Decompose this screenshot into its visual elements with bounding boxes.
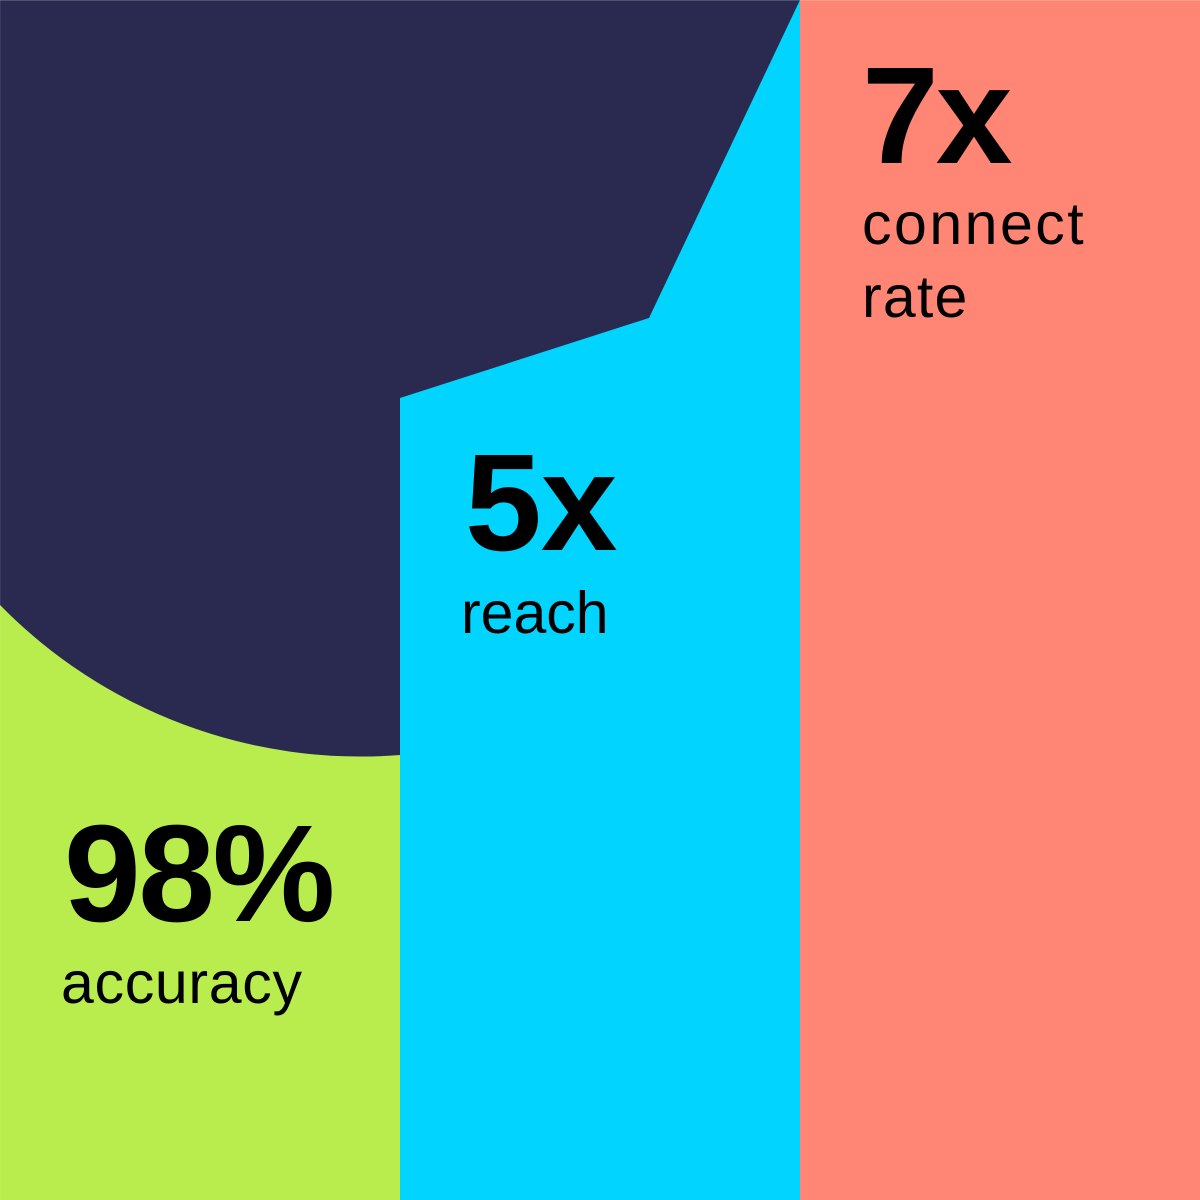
label: connect rate bbox=[862, 191, 1086, 330]
stat: 98% value: 98% bbox=[64, 797, 333, 951]
stat: 5x value: 5x bbox=[465, 426, 616, 580]
label: connect rate: rate bbox=[862, 264, 968, 330]
label: connect rate: connect bbox=[862, 191, 1086, 257]
panel: connect rate column bbox=[800, 0, 1200, 1200]
panel: accuracy column bbox=[0, 0, 400, 1200]
panel: reach column bbox=[400, 0, 800, 1200]
dark growth shape bbox=[0, 0, 800, 757]
label: reach: reach bbox=[461, 580, 609, 646]
stat: 7x value: 7x bbox=[862, 38, 1010, 192]
label: accuracy: accuracy bbox=[61, 950, 303, 1016]
